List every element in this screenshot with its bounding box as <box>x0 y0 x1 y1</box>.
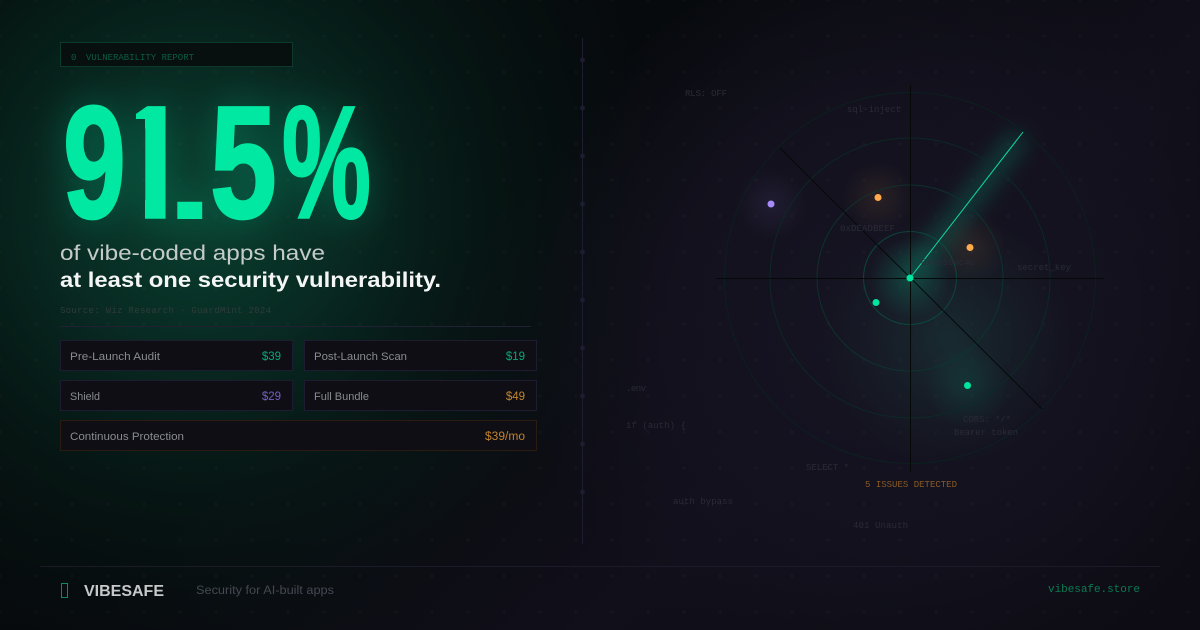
floating code fragments: 0x4e554c4c <box>921 258 975 268</box>
threat dot: orange right <box>966 244 974 251</box>
radar glows <box>735 136 1075 465</box>
price card: shield: Shield <box>70 391 100 403</box>
subheading: at least one security vulnerability. <box>60 269 441 292</box>
price card: full bundle: Full Bundle <box>314 391 369 403</box>
price card: post-launch scan <box>304 340 536 370</box>
radar caption: 5 ISSUES DETECTED <box>865 480 957 490</box>
headline statistic <box>52 92 382 232</box>
footer url: vibesafe.store <box>1048 584 1140 596</box>
footer brand: VIBESAFE <box>84 583 164 600</box>
floating code fragments: if (auth) { <box>626 421 686 431</box>
radar rings <box>724 92 1096 464</box>
headline statistic: 9 <box>63 74 126 252</box>
price card: continuous protection <box>60 420 536 450</box>
floating code fragments: secret_key <box>1017 263 1072 273</box>
badge: vulnerability report: VULNERABILITY REPORT <box>86 53 195 63</box>
radar center point <box>906 274 914 282</box>
vertical timeline rail <box>580 38 585 544</box>
floating code fragments: SELECT * <box>806 463 849 473</box>
badge: vulnerability report: 0 <box>71 53 76 63</box>
floating code fragments: .env <box>626 384 647 394</box>
headline statistic: 5 <box>210 73 277 251</box>
price card: post-launch scan: Post-Launch Scan <box>314 351 407 363</box>
headline statistic: . <box>168 124 212 241</box>
headline statistic: 1 <box>112 73 195 252</box>
footer divider <box>40 566 1160 567</box>
price card: continuous protection: Continuous Protection <box>70 431 184 443</box>
headline statistic: % <box>282 74 371 252</box>
price card: shield: $29 <box>262 391 281 403</box>
icon: shield placeholder <box>62 584 68 598</box>
price card: full bundle <box>304 380 536 410</box>
floating code fragments: CORS: */* <box>963 415 1011 425</box>
price card: post-launch scan: $19 <box>506 351 525 363</box>
radar chart <box>716 85 1104 472</box>
subheading: of vibe-coded apps have <box>60 242 325 265</box>
radar crosshair <box>716 85 1104 472</box>
threat dot: violet <box>768 200 774 208</box>
floating code fragments <box>626 89 1072 531</box>
floating code fragments: RLS: OFF <box>685 89 727 99</box>
price card: shield <box>60 380 292 410</box>
price card: full bundle: $49 <box>506 391 525 403</box>
divider <box>60 326 531 327</box>
source note: Source: Wiz Research · GuardMint 2024 <box>60 306 271 316</box>
floating code fragments: sql-inject <box>847 105 901 115</box>
price card: pre-launch audit <box>60 340 292 370</box>
threat dot: green left <box>872 299 880 306</box>
subheading <box>60 242 441 292</box>
price card: continuous protection: $39/mo <box>485 431 525 443</box>
badge: vulnerability report <box>60 42 292 66</box>
floating code fragments: Bearer token <box>954 428 1018 438</box>
floating code fragments: 401 Unauth <box>853 521 908 531</box>
threat dot: orange upper <box>874 194 882 201</box>
price card: pre-launch audit: $39 <box>262 351 281 363</box>
price card: pre-launch audit: Pre-Launch Audit <box>70 351 160 363</box>
radar sweep line <box>910 132 1023 278</box>
footer brand: Security for AI-built apps <box>196 585 334 597</box>
floating code fragments: 0xDEADBEEF <box>840 224 895 234</box>
threat dot: green lower <box>964 382 971 389</box>
footer brand <box>62 583 334 600</box>
floating code fragments: auth bypass <box>673 497 733 507</box>
